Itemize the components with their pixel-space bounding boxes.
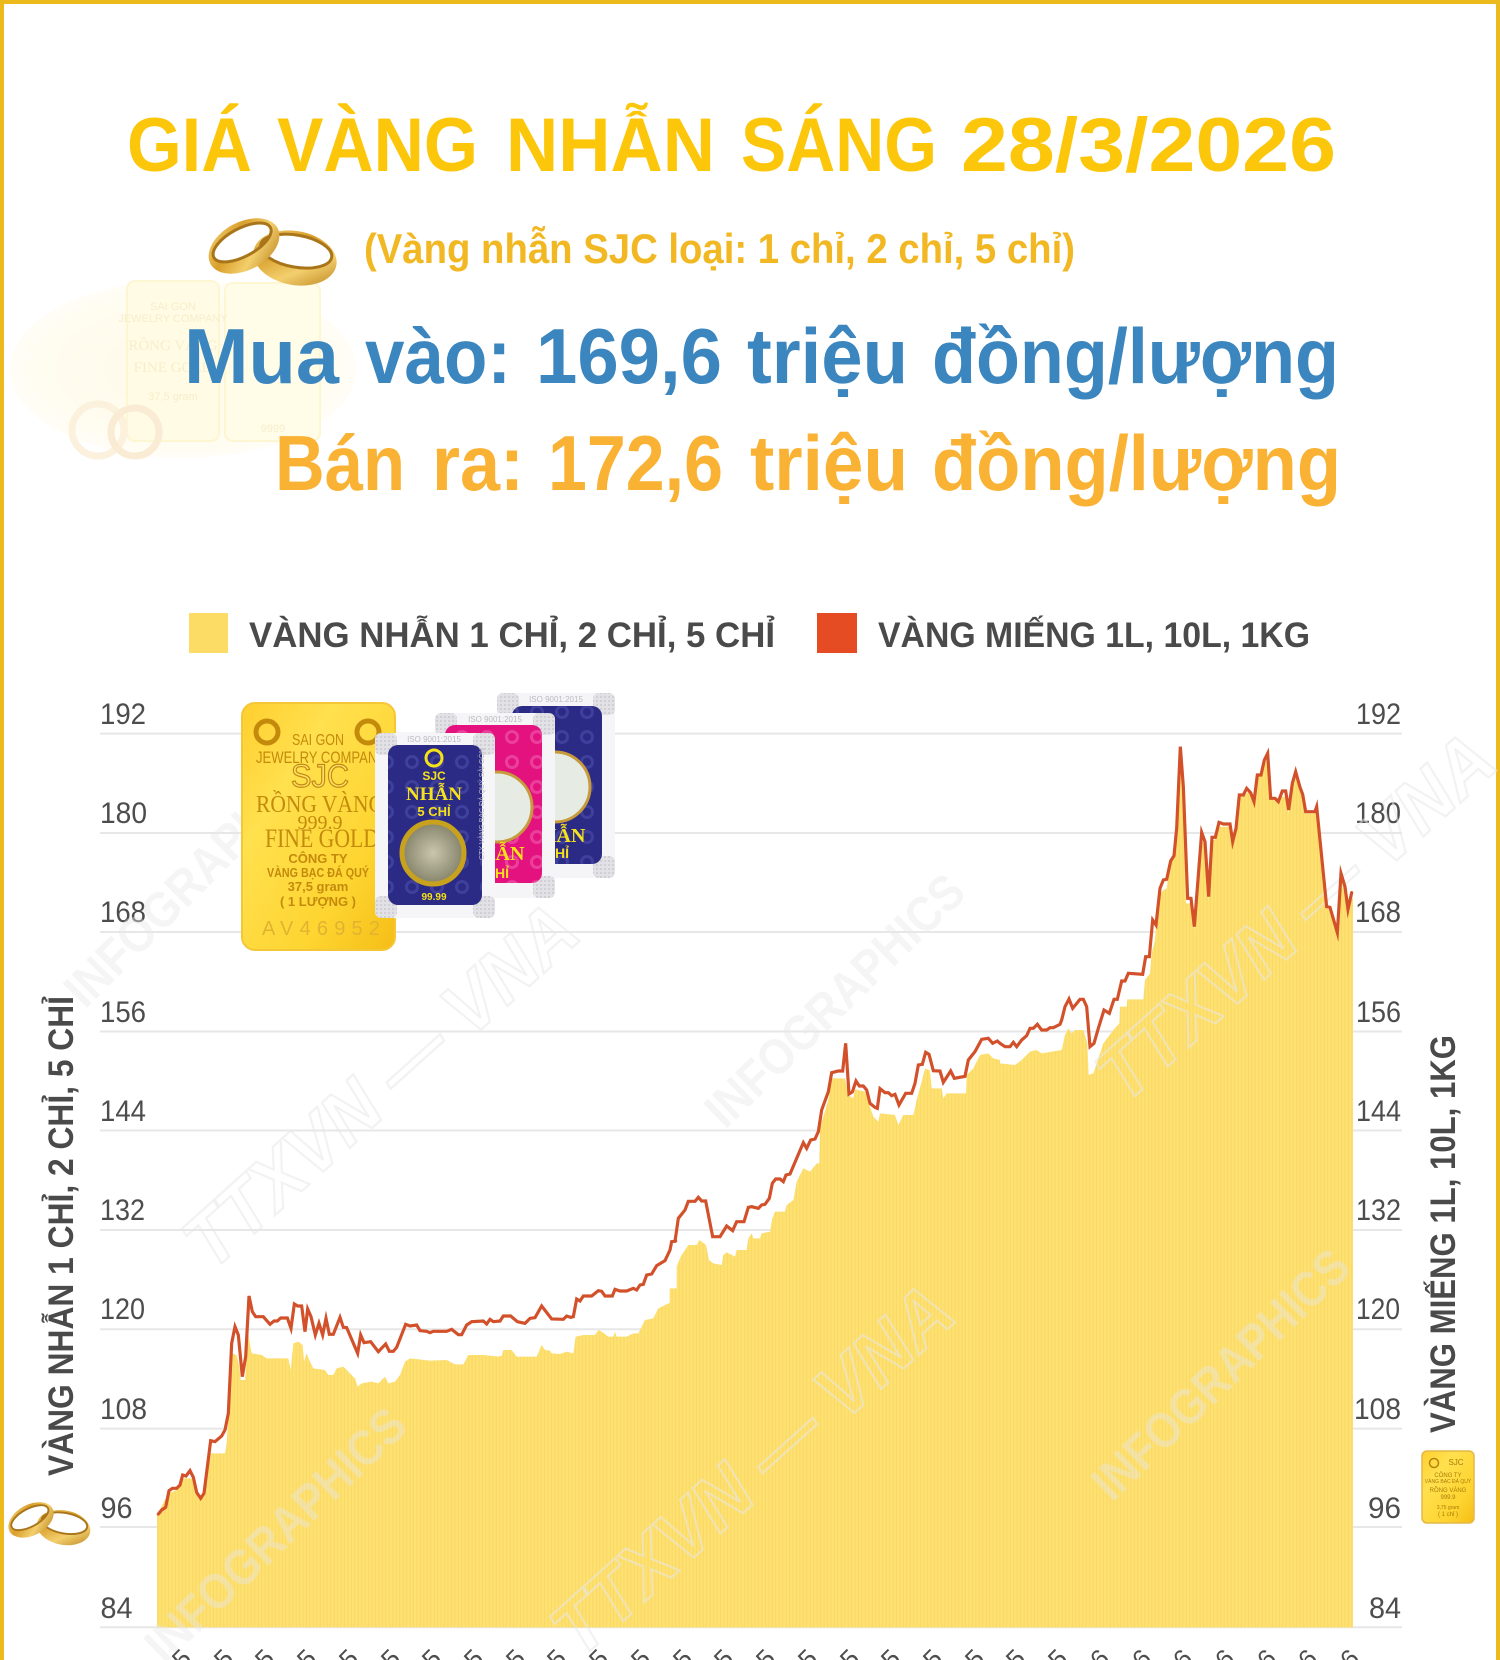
gold bar: SJC Rồng Vàng: SJC bbox=[291, 758, 349, 794]
gold bar: SJC Rồng Vàng: SAI GON bbox=[292, 732, 344, 749]
right axis labels: 132 bbox=[1356, 1194, 1401, 1227]
faint background photo of gold bars: SAI GON bbox=[150, 301, 196, 313]
gold bar: SJC Rồng Vàng: AV46952 bbox=[262, 918, 380, 940]
watermarks: INFOGRAPHICS bbox=[694, 863, 976, 1138]
icon: small gold bar near right axis: 999.9 bbox=[1440, 1495, 1456, 1501]
gold bar: SJC Rồng Vàng: RỒNG VÀNG bbox=[256, 791, 384, 818]
right axis labels: 84 bbox=[1369, 1592, 1401, 1625]
buy price bbox=[184, 312, 1339, 400]
package: front 5 chỉ card: ISO 9001:2015 bbox=[407, 735, 461, 744]
left axis labels: 132 bbox=[100, 1194, 145, 1227]
right axis labels: 156 bbox=[1356, 996, 1401, 1029]
left axis labels: 180 bbox=[100, 797, 147, 830]
package: back 1 chỉ card: NHẪN bbox=[527, 822, 586, 847]
sell price: Bán bbox=[275, 419, 405, 507]
icon: small rings near left axis bbox=[2, 1495, 93, 1549]
icon: small gold bar near right axis: VÀNG BẠC ĐÁ QUÝ bbox=[1425, 1478, 1472, 1485]
legend label: bar gold: VÀNG MIẾNG 1L, 10L, 1KG bbox=[878, 615, 1310, 655]
right axis labels: 96 bbox=[1368, 1492, 1401, 1525]
package: back 1 chỉ card: CHỈ bbox=[545, 845, 569, 861]
icon: small gold bar near right axis: CÔNG TY bbox=[1434, 1472, 1462, 1479]
buy price: vào: bbox=[365, 312, 511, 400]
watermarks: TTXVN — VNA bbox=[166, 887, 595, 1285]
left axis labels: 84 bbox=[100, 1592, 132, 1625]
buy price: 169,6 bbox=[536, 312, 722, 400]
package: back 1 chỉ card: ISO 9001:2015 bbox=[529, 695, 583, 704]
bar chart: ring gold price bbox=[157, 733, 1353, 1628]
package: front 5 chỉ card bbox=[375, 733, 495, 918]
title: NHẪN bbox=[506, 102, 715, 188]
right axis labels bbox=[1354, 698, 1401, 1625]
gold bar: SJC Rồng Vàng: 999.9 bbox=[298, 812, 342, 834]
legend label: ring gold: VÀNG NHẪN 1 CHỈ, 2 CHỈ, 5 CHỈ bbox=[249, 615, 775, 655]
buy price: Mua bbox=[184, 312, 340, 400]
package: middle 2 chỉ card bbox=[435, 713, 555, 898]
left axis labels bbox=[100, 698, 147, 1625]
gold bar: SJC Rồng Vàng: VÀNG BẠC ĐÁ QUÝ bbox=[267, 865, 369, 880]
gold bar: SJC Rồng Vàng: CÔNG TY bbox=[288, 851, 348, 866]
chart gridlines bbox=[100, 734, 1402, 1627]
right axis labels: 168 bbox=[1355, 896, 1401, 929]
image: SJC gold bar and ring packages bbox=[242, 693, 615, 950]
buy price: triệu bbox=[747, 312, 908, 400]
gold bar: SJC Rồng Vàng: 37,5 gram bbox=[288, 879, 348, 894]
package: back 1 chỉ card bbox=[497, 693, 615, 878]
subtitle: (Vàng nhẫn SJC loại: 1 chỉ, 2 chỉ, 5 chỉ) bbox=[364, 224, 1075, 272]
right axis labels: 144 bbox=[1356, 1095, 1401, 1128]
icon: gold wedding rings bbox=[199, 207, 341, 292]
package: middle 2 chỉ card: NHẪN bbox=[466, 840, 525, 865]
icon: small gold bar near right axis bbox=[1422, 1451, 1474, 1523]
faint background photo of gold bars: 9999 bbox=[261, 423, 285, 435]
faint background photo of gold bars bbox=[10, 280, 356, 458]
left axis title: VÀNG NHẪN 1 CHỈ, 2 CHỈ, 5 CHỈ bbox=[41, 996, 81, 1476]
right axis labels: 180 bbox=[1355, 797, 1401, 830]
left axis labels: 144 bbox=[100, 1095, 146, 1128]
watermarks: INFOGRAPHICS bbox=[1081, 1238, 1361, 1511]
package: front 5 chỉ card: SJC bbox=[422, 769, 446, 783]
icon: small gold bar near right axis: RỒNG VÀNG bbox=[1430, 1487, 1467, 1494]
faint background photo of gold bars: 37,5 gram bbox=[148, 391, 198, 403]
right axis labels: 120 bbox=[1356, 1293, 1400, 1326]
sell price: 172,6 bbox=[548, 419, 723, 507]
left axis labels: 108 bbox=[100, 1393, 147, 1426]
faint background photo of gold bars: FINE GOLD bbox=[134, 360, 213, 376]
gold bar: SJC Rồng Vàng: FINE GOLD bbox=[265, 824, 379, 853]
faint background photo of gold bars: RỒNG VÀNG bbox=[128, 336, 218, 354]
package: front 5 chỉ card: 5 CHỈ bbox=[417, 804, 451, 819]
sell price: đồng/lượng bbox=[932, 419, 1341, 507]
sell price: ra: bbox=[432, 419, 524, 507]
gold bar: SJC Rồng Vàng bbox=[242, 703, 395, 950]
legend swatch: bar gold bbox=[817, 613, 857, 653]
line chart: bar gold price bbox=[158, 747, 1352, 1514]
watermarks bbox=[53, 717, 1500, 1660]
left axis labels: 156 bbox=[100, 996, 146, 1029]
legend bbox=[189, 613, 1310, 655]
left axis labels: 192 bbox=[100, 698, 146, 731]
right axis title: VÀNG MIẾNG 1L, 10L, 1KG bbox=[1423, 1035, 1463, 1433]
right axis labels: 108 bbox=[1354, 1393, 1401, 1426]
x axis date labels, cropped at the page edge bbox=[149, 1643, 1365, 1660]
package: front 5 chỉ card: CTY VÀNG BẠC ĐÁ QUÝ SÀI GÒN bbox=[477, 748, 486, 860]
title: VÀNG bbox=[277, 103, 478, 188]
left axis labels: 120 bbox=[100, 1293, 145, 1326]
package: middle 2 chỉ card: CHỈ bbox=[485, 865, 509, 881]
faint background photo of gold bars: JEWELRY COMPANY bbox=[118, 313, 228, 325]
icon: small gold bar near right axis: 3,75 gram bbox=[1437, 1505, 1459, 1511]
title bbox=[127, 102, 1336, 188]
gold bar: SJC Rồng Vàng: JEWELRY COMPANY bbox=[256, 748, 386, 767]
watermarks: INFOGRAPHICS bbox=[53, 734, 337, 1018]
package: front 5 chỉ card: NHẪN bbox=[406, 783, 462, 805]
title: GIÁ bbox=[127, 103, 252, 188]
left axis labels: 96 bbox=[100, 1492, 132, 1525]
right axis labels: 192 bbox=[1356, 698, 1401, 731]
title: 28/3/2026 bbox=[961, 103, 1336, 188]
left axis labels: 168 bbox=[100, 896, 146, 929]
package: middle 2 chỉ card: ISO 9001:2015 bbox=[468, 715, 522, 724]
package: front 5 chỉ card: 99.99 bbox=[421, 892, 447, 903]
icon: small gold bar near right axis: SJC bbox=[1448, 1458, 1464, 1467]
legend swatch: ring gold bbox=[189, 613, 228, 653]
icon: small gold bar near right axis: ( 1 chỉ ) bbox=[1438, 1511, 1458, 1518]
buy price: đồng/lượng bbox=[932, 312, 1339, 400]
sell price: triệu bbox=[750, 419, 908, 507]
sell price bbox=[275, 419, 1341, 507]
title: SÁNG bbox=[741, 103, 937, 188]
gold bar: SJC Rồng Vàng: ( 1 LƯỢNG ) bbox=[280, 894, 356, 909]
